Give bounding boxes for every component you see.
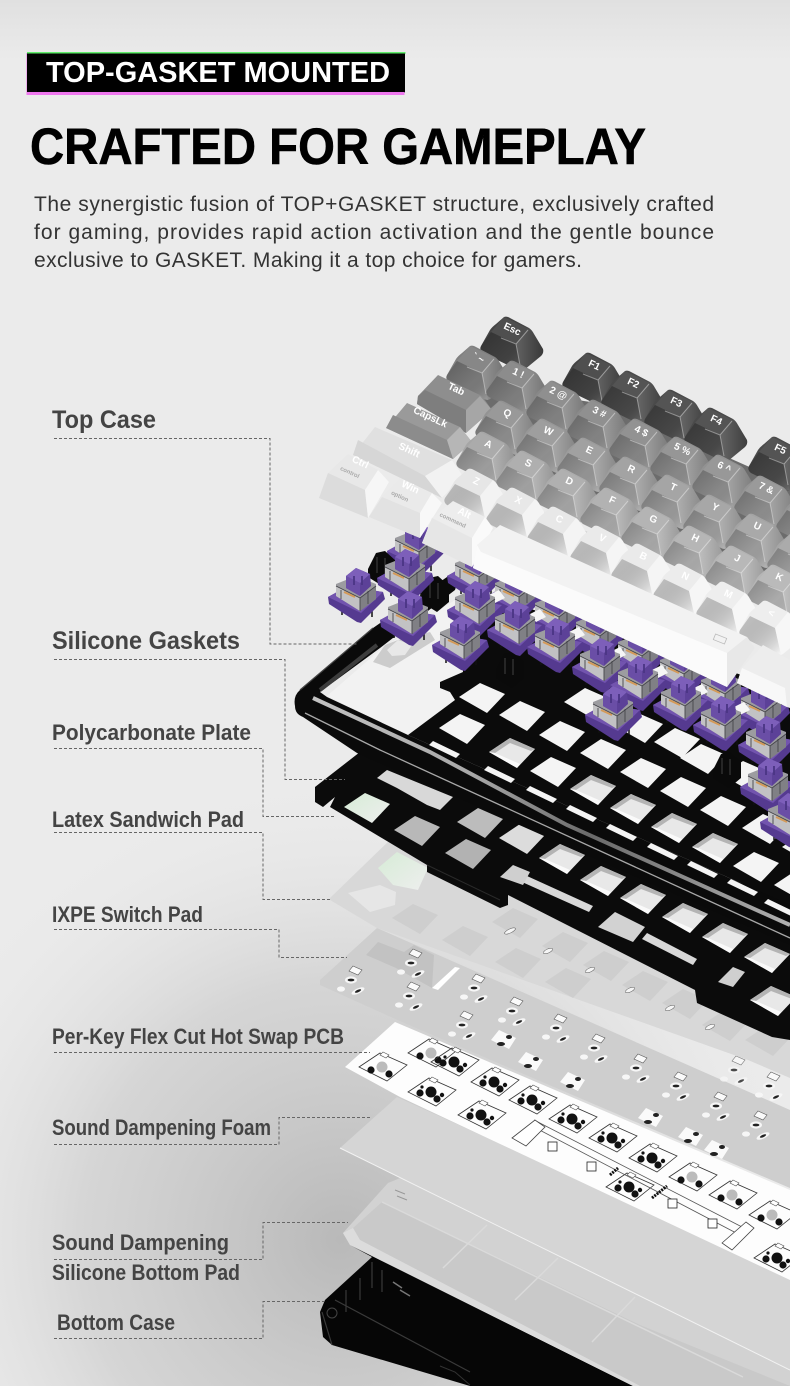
label: polycarbonate plate [52,720,335,816]
keycaps: R [625,463,637,477]
keycaps: 3 # [590,405,608,421]
keycaps [319,317,790,708]
keycaps: 4 $ [632,424,650,440]
wide key: Ctrl [319,454,389,518]
keycaps: W [541,425,555,439]
keycaps: 5 % [672,441,692,458]
wide key: Win [369,478,442,538]
keycaps: Z [471,475,481,488]
wide key: Shift: Shift [397,441,422,461]
label: polycarbonate plate: Polycarbonate Plate [52,720,251,745]
keycaps: Q [501,407,513,420]
label: silicone gaskets: Silicone Gaskets [52,627,240,655]
keycaps: X [513,494,524,507]
keycaps: K [773,571,785,585]
label: bottom case: Bottom Case [57,1310,175,1335]
label: top case: Top Case [52,406,156,434]
wide key: Ctrl: control [339,466,360,480]
label: latex sandwich pad [52,807,330,900]
keycaps: A [482,438,494,451]
wide key: Alt: Alt [456,506,473,522]
wide key: Win: option [390,491,409,504]
keycaps: Esc [502,321,523,339]
label: silicone gaskets [52,627,345,780]
keycaps: F5 [772,442,788,457]
tag: top-gasket mounted: TOP-GASKET MOUNTED [46,57,390,89]
label: top case [52,406,358,644]
description: exclusive to GASKET. Making it a top choice for gamers. [34,249,582,272]
keycaps: D [563,475,575,488]
IXPE switch pad [320,928,790,1188]
keycaps: G [647,513,659,526]
keycaps: U [751,520,763,533]
label: per-key flex cut hot swap pcb: Per-Key Flex Cut Hot Swap PCB [52,1024,344,1049]
label: sound dampening silicone bottom pad: Sound Dampening [52,1230,229,1255]
wide keys: Tab and CapsLk: Tab [446,381,466,398]
keycaps: E [584,444,595,457]
keycaps: 7 & [757,480,775,497]
keycaps: 2 @ [548,385,569,403]
label: ixpe switch pad: IXPE Switch Pad [52,902,203,927]
silicone bottom pad [343,1170,790,1386]
wide key: Alt: command [438,512,467,530]
sound dampening foam [340,1097,790,1370]
wide key: Ctrl: Ctrl [350,454,370,471]
keycaps: T [668,481,678,494]
keycaps: H [689,532,701,545]
top case frame and upper plate [295,566,790,945]
switches and stabilizers [328,522,790,848]
keycaps: Y [710,501,721,514]
wide key: Shift [353,427,463,498]
description [34,193,714,272]
wide keys: Tab and CapsLk [386,375,492,459]
wide key: Win: Win [399,479,421,497]
title: CRAFTED FOR GAMEPLAY [30,118,646,175]
keycaps: S [523,457,534,470]
label: bottom case [54,1302,324,1338]
label: sound dampening silicone bottom pad [52,1222,348,1285]
latex sandwich pad [330,838,790,1078]
bottom case [320,1245,640,1386]
label: ixpe switch pad [52,902,347,958]
wide keys: Tab and CapsLk: CapsLk [411,405,449,431]
PCB [345,1022,790,1280]
label: sound dampening silicone bottom pad: Silicone Bottom Pad [52,1260,240,1285]
label: sound dampening foam [52,1115,372,1144]
label: sound dampening foam: Sound Dampening Foam [52,1115,271,1140]
description: The synergistic fusion of TOP+GASKET structure, exclusively crafted [34,193,714,216]
keycaps: F2 [625,376,641,391]
right alt key [737,645,790,708]
keycaps: V [597,532,608,545]
keycaps: N [679,570,691,583]
tag: top-gasket mounted [26,52,406,95]
keycaps: 6 ^ [715,460,733,476]
keycaps: F [607,494,617,507]
keycaps: J [732,553,742,565]
polycarbonate plate [315,752,790,1040]
label: latex sandwich pad: Latex Sandwich Pad [52,807,244,832]
wide key: Alt [422,501,493,567]
keycaps: F1 [586,358,602,373]
keycaps: F3 [668,395,684,410]
keycaps: F4 [708,413,724,428]
keycaps: 1 ! [510,366,526,381]
keycaps: M [722,588,734,601]
keycaps: < [766,608,776,620]
keycaps: ` ~ [470,351,486,366]
description: for gaming, provides rapid action activation and the gentle bounce [34,221,714,244]
keycaps: C [553,513,565,526]
space bar [473,525,755,687]
keycaps: B [637,550,649,563]
